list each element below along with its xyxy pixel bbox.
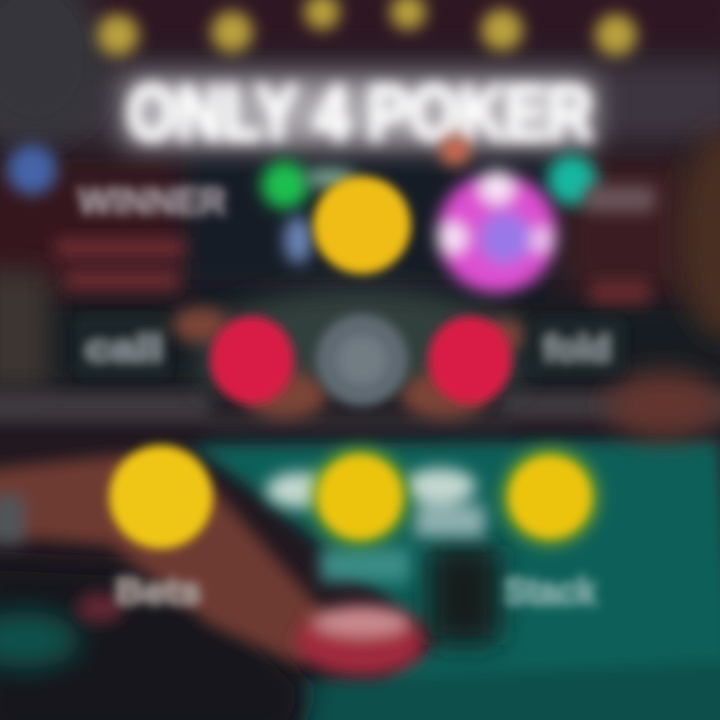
middle row right label: fold [544, 330, 610, 368]
small accent chips row [7, 136, 597, 209]
icon: pink poker chip [437, 170, 557, 293]
icon: yellow coin lower right [509, 456, 591, 538]
poker table felt [190, 440, 720, 720]
icon: green chip [261, 161, 309, 209]
icon: yellow coin top [313, 176, 411, 274]
foreground arm [0, 455, 340, 665]
icon: gray chip [316, 314, 408, 406]
ceiling lights row [97, 0, 637, 56]
icon: yellow coin lower centre [318, 455, 402, 539]
right player hair [677, 130, 720, 340]
middle row right label [530, 318, 625, 376]
background figure: left silhouette [0, 0, 105, 390]
pale backing shapes around lower coin [266, 468, 485, 582]
foreground teal patch [0, 612, 80, 668]
icon: red chip right [428, 316, 512, 404]
icon: red chip left [210, 316, 294, 404]
text block: upper right label [585, 186, 655, 304]
lower right label: Stack [504, 571, 597, 613]
text block: upper left red lines [55, 238, 185, 290]
foreground red sleeve accent [76, 592, 124, 624]
foreground red cards [296, 604, 428, 676]
icon: teal chip [547, 155, 597, 205]
glow behind lower coins [311, 448, 599, 546]
middle row left label: call [86, 330, 162, 368]
pale backing shapes near centre coin [284, 168, 356, 264]
text block: upper left label: WINNER [78, 181, 226, 223]
foreground dark shadow [0, 560, 310, 720]
right player hand [607, 371, 720, 439]
title glow [125, 78, 595, 146]
middle row left label [75, 315, 170, 377]
central player torso [200, 288, 520, 390]
title: ONLY 4 POKER [128, 71, 592, 156]
table rail [0, 392, 720, 430]
icon: blue chip [7, 145, 57, 195]
player hands behind chips [172, 307, 525, 419]
icon: orange chip [440, 136, 470, 166]
icon: yellow coin lower left [109, 445, 213, 549]
lower left label: Bets [115, 571, 201, 613]
dark chip stack [428, 545, 500, 645]
